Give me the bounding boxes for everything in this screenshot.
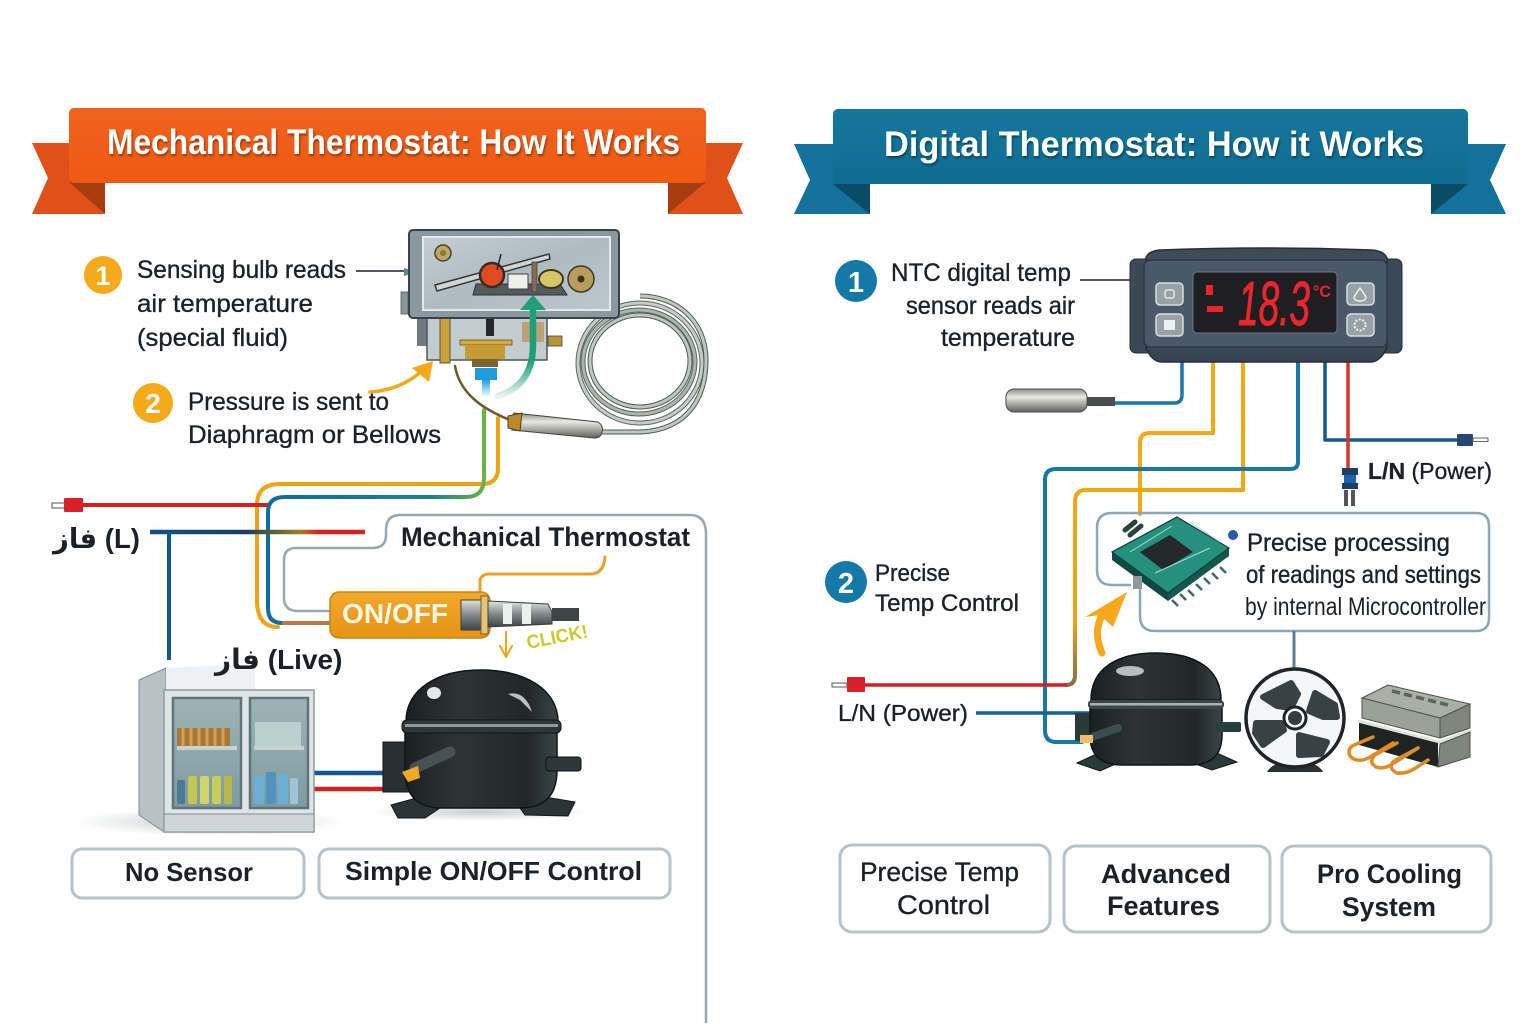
lower body (401, 292, 562, 397)
step 1: sensing bulb: 1 (95, 261, 111, 291)
step 2: precise temp control: 2 (838, 568, 854, 600)
microchip (1112, 517, 1229, 606)
fan (1246, 669, 1344, 772)
step 2: pressure: Diaphragm or Bellows (188, 421, 441, 449)
power connector right (1457, 434, 1488, 446)
panel: digital thermostat (794, 109, 1506, 932)
capillary to bulb (455, 366, 510, 420)
divider between panels (767, 231, 769, 1022)
tag: advanced features: Features (1107, 891, 1220, 921)
thermostat device with coil (401, 230, 706, 438)
wires fridge to compressor (312, 773, 384, 789)
wires from thermostat to switch (257, 410, 498, 627)
tag: precise temp control (840, 845, 1050, 932)
callout: microcontroller: of readings and settings (1246, 561, 1481, 589)
heading ribbon: digital (794, 109, 1506, 214)
display readout: 18.3 (1238, 270, 1310, 339)
green pressure arrow (498, 295, 546, 396)
tag: advanced features: Advanced (1101, 859, 1231, 889)
upper shelf goods (177, 722, 304, 750)
tag: advanced features (1064, 846, 1270, 932)
lower shelf bottles (177, 772, 298, 804)
tag: no sensor: No Sensor (125, 857, 253, 887)
step 1: NTC sensor: NTC digital temp (891, 259, 1071, 287)
tag: no sensor (72, 849, 304, 898)
heading ribbon: digital: Digital Thermostat: How it Works (884, 125, 1424, 164)
tag: pro cooling system: System (1342, 892, 1436, 922)
NTC probe (1006, 389, 1115, 412)
step 1: NTC sensor: sensor reads air (906, 292, 1075, 320)
mains live wires (52, 498, 365, 660)
orange arrow to chip (1085, 592, 1127, 653)
evaporator (1349, 685, 1470, 773)
step 1: NTC sensor: temperature (941, 324, 1075, 352)
thermostat housing (409, 230, 619, 318)
tag: simple control: Simple ON/OFF Control (345, 856, 642, 886)
label: mechanical thermostat: Mechanical Thermostat (401, 522, 690, 552)
callout border: mechanical thermostat (284, 515, 706, 1022)
digital controller (1130, 248, 1402, 362)
on/off switch: ON/OFF (342, 598, 448, 629)
label: L/N power left: L/N (Power) (838, 700, 968, 726)
capillary coil (578, 296, 706, 432)
step 2: precise temp control: Precise (875, 560, 950, 587)
panel: mechanical thermostat (32, 108, 743, 1022)
heading ribbon: mechanical: Mechanical Thermostat: How It Works (107, 123, 680, 162)
fridge (75, 664, 345, 836)
step 1: sensing bulb: (special fluid) (137, 324, 288, 352)
tag: pro cooling system: Pro Cooling (1317, 859, 1462, 889)
power plug left (832, 677, 865, 692)
compressor left (370, 670, 590, 821)
step 1: NTC sensor (835, 259, 1130, 352)
tag: precise temp control: Precise Temp (860, 857, 1019, 887)
wires from controller (864, 362, 1458, 742)
step 2: pressure: Pressure is sent to (188, 388, 389, 416)
tag: simple control (319, 849, 670, 898)
display readout: °C (1313, 282, 1331, 301)
step 2: pressure: 2 (145, 388, 161, 419)
callout: microcontroller (1097, 513, 1489, 670)
on/off switch (330, 557, 605, 638)
label: live: فاز (Live) (213, 644, 342, 676)
step 1: NTC sensor: 1 (848, 267, 864, 299)
step 2: precise temp control: Temp Control (875, 590, 1019, 617)
label: L/N power right: L/N (Power) (1368, 458, 1492, 484)
step 2: pressure (133, 361, 441, 449)
callout: microcontroller: Precise processing (1247, 529, 1450, 557)
power terminal (1342, 468, 1358, 506)
step 2: precise temp control (825, 560, 1019, 617)
compressor right (1075, 653, 1241, 771)
click indicator (500, 621, 590, 657)
tag: pro cooling system (1282, 846, 1491, 932)
callout: microcontroller: by internal Microcontroller (1245, 593, 1486, 621)
step 1: sensing bulb: air temperature (137, 290, 313, 318)
tag: precise temp control: Control (897, 890, 990, 920)
click indicator: CLICK! (525, 621, 590, 654)
label: live L: فاز (L) (51, 523, 140, 555)
heading ribbon: mechanical (32, 108, 743, 214)
step 1: sensing bulb (84, 256, 417, 352)
sensing bulb (508, 413, 602, 438)
display readout (1206, 270, 1331, 339)
step 1: sensing bulb: Sensing bulb reads (137, 256, 346, 284)
buttons (1156, 283, 1374, 336)
